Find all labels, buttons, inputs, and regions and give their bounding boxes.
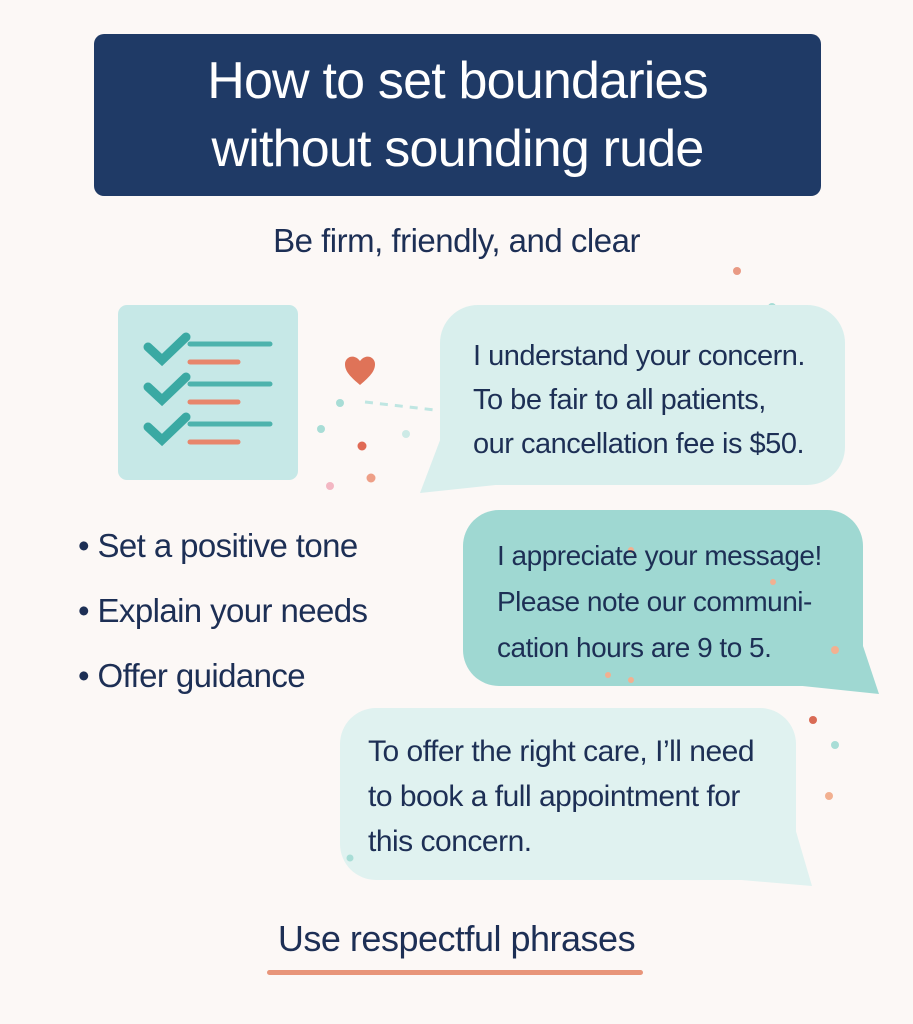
bubble 3: to book a full appointment for: [368, 780, 740, 813]
bubble 2: Please note our communi-: [497, 586, 812, 617]
bubble 3: [340, 708, 812, 886]
bubble 1: our cancellation fee is $50.: [473, 428, 804, 460]
bullet list: [78, 527, 367, 694]
bullet list: • Offer guidance: [78, 657, 305, 694]
bubble 1: [420, 305, 845, 493]
title banner: [94, 34, 821, 196]
bubble 2: I appreciate your message!: [497, 540, 822, 571]
bubble 2: [463, 510, 879, 694]
bubble 1: To be fair to all patients,: [473, 384, 766, 416]
bullet list: • Explain your needs: [78, 592, 367, 629]
icon: heart and dots: [317, 267, 776, 490]
bullet list: • Set a positive tone: [78, 527, 358, 564]
subtitle: Be firm, friendly, and clear: [273, 222, 640, 259]
bubble 2: cation hours are 9 to 5.: [497, 632, 771, 663]
bubble 3: To offer the right care, I’ll need: [368, 735, 754, 768]
bubble 1: I understand your concern.: [473, 340, 805, 372]
bubble 3: this concern.: [368, 825, 532, 858]
title banner: How to set boundaries: [207, 52, 708, 110]
footer heading: Use respectful phrases: [278, 918, 635, 959]
icon: checklist panel: [118, 305, 298, 480]
decorative dots right: [809, 716, 839, 800]
underline: [267, 970, 643, 975]
title banner: without sounding rude: [211, 120, 704, 178]
